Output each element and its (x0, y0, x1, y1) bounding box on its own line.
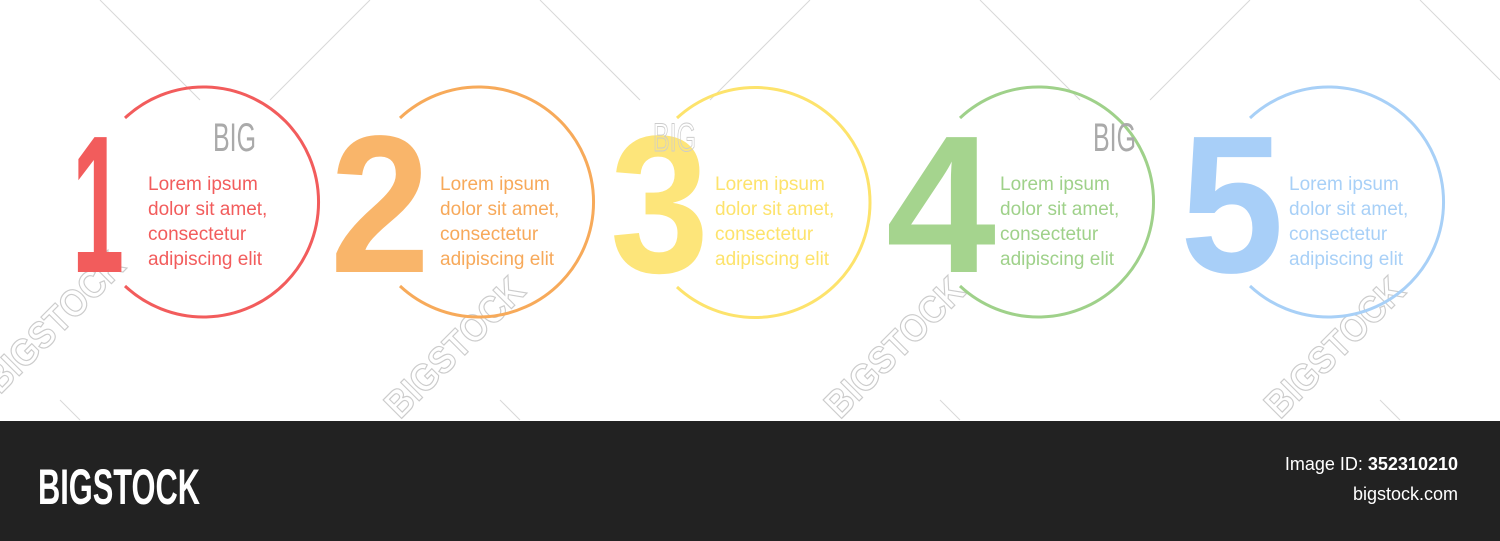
step 5 (1180, 87, 1444, 317)
footer bar (0, 421, 1500, 541)
footer bar: Image ID: 352310210 (1285, 454, 1458, 474)
step 4: 4 (886, 95, 996, 314)
step 3: 3 (610, 95, 709, 314)
step 1: 1 (72, 95, 124, 314)
watermarks: BIGSTOCK (817, 269, 974, 426)
step 4: BIG (1093, 116, 1136, 160)
step 1: adipiscing elit (148, 249, 263, 270)
step 5: 5 (1180, 95, 1284, 314)
step 3 (610, 88, 870, 318)
step 4 (886, 87, 1154, 317)
watermarks: BIGSTOCK (377, 269, 534, 426)
step 4: adipiscing elit (1000, 249, 1115, 270)
watermarks: BIGSTOCK (1257, 269, 1414, 426)
step 3: Lorem ipsum (715, 174, 825, 195)
step 1: consectetur (148, 224, 247, 245)
step 3: consectetur (715, 224, 814, 245)
step 2: 2 (330, 95, 430, 314)
step 3: BIG (653, 116, 696, 160)
step 2: dolor sit amet, (440, 199, 559, 220)
step 1 (72, 87, 319, 317)
watermarks (0, 244, 1414, 426)
step 2: consectetur (440, 224, 539, 245)
step 5: consectetur (1289, 224, 1388, 245)
footer bar: BIGSTOCK (38, 459, 200, 515)
step 4: dolor sit amet, (1000, 199, 1119, 220)
step 1: Lorem ipsum (148, 174, 258, 195)
step 5: adipiscing elit (1289, 249, 1404, 270)
step 5: dolor sit amet, (1289, 199, 1408, 220)
step 3: dolor sit amet, (715, 199, 834, 220)
step 2 (330, 87, 594, 317)
footer bar: bigstock.com (1353, 484, 1458, 504)
step 4: consectetur (1000, 224, 1099, 245)
step 1: BIG (213, 116, 256, 160)
step 3: adipiscing elit (715, 249, 830, 270)
step 2: adipiscing elit (440, 249, 555, 270)
step 1: dolor sit amet, (148, 199, 267, 220)
step 2: Lorem ipsum (440, 174, 550, 195)
step 5: Lorem ipsum (1289, 174, 1399, 195)
step 4: Lorem ipsum (1000, 174, 1110, 195)
